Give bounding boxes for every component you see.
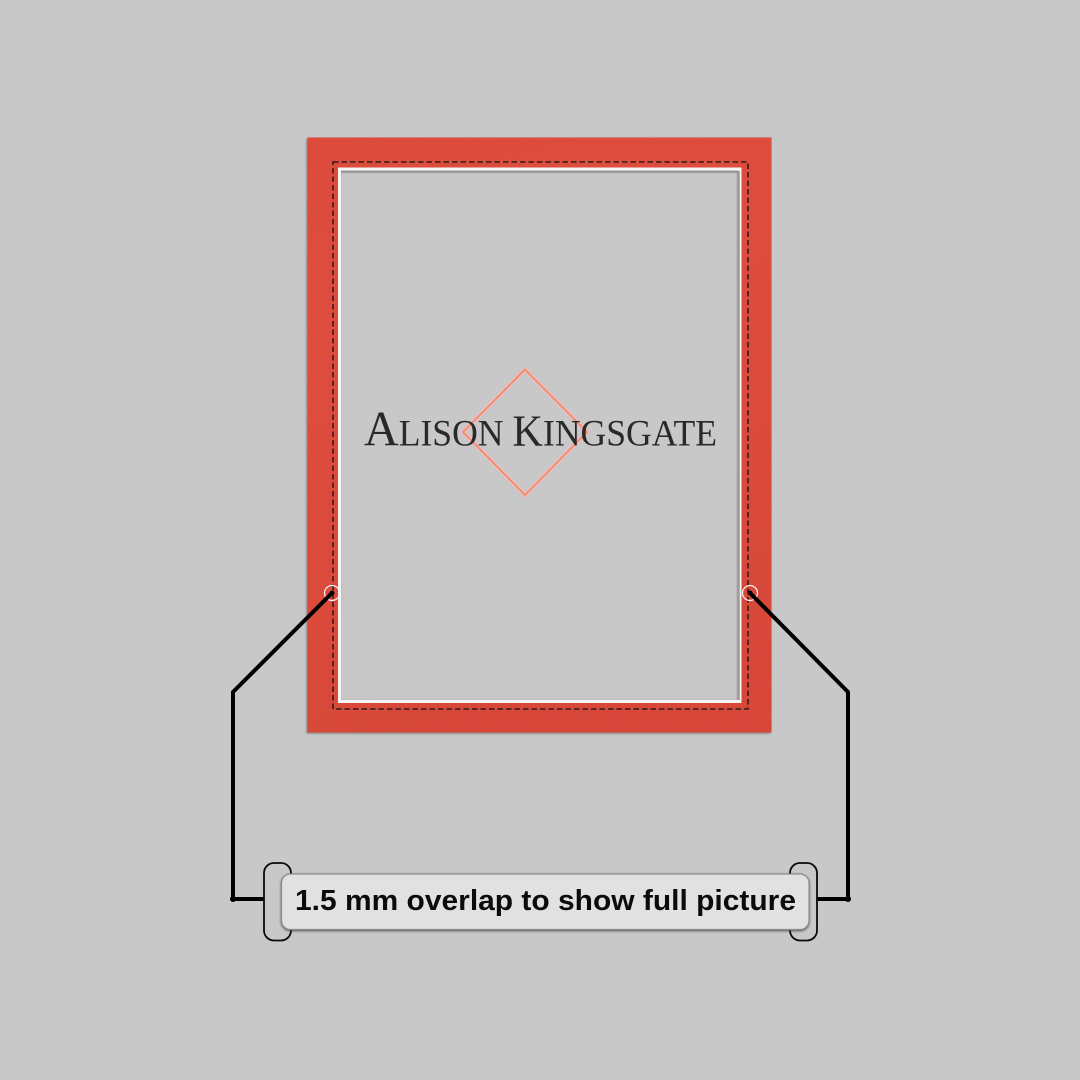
- frame border: [308, 138, 772, 732]
- label text: 1.5 mm overlap to show full picture: [295, 885, 796, 917]
- icon: diamond outline: [463, 370, 587, 495]
- callout marker: right overlap point: [742, 586, 758, 600]
- callout: overlap label: [264, 863, 817, 940]
- inner white edge: [338, 168, 742, 703]
- arrow: right leader line: [748, 590, 851, 902]
- dashed overlap guide: [333, 162, 748, 709]
- arrow: left leader line: [230, 590, 334, 902]
- logo wordmark: ALISON KINGSGATE: [364, 400, 717, 456]
- panel: red picture frame: [308, 138, 772, 732]
- logo: Alison Kingsgate: [364, 370, 717, 495]
- right bracket tab: [790, 863, 817, 940]
- callout marker: left overlap point: [324, 586, 340, 600]
- label box: [282, 874, 809, 930]
- left bracket tab: [264, 863, 291, 940]
